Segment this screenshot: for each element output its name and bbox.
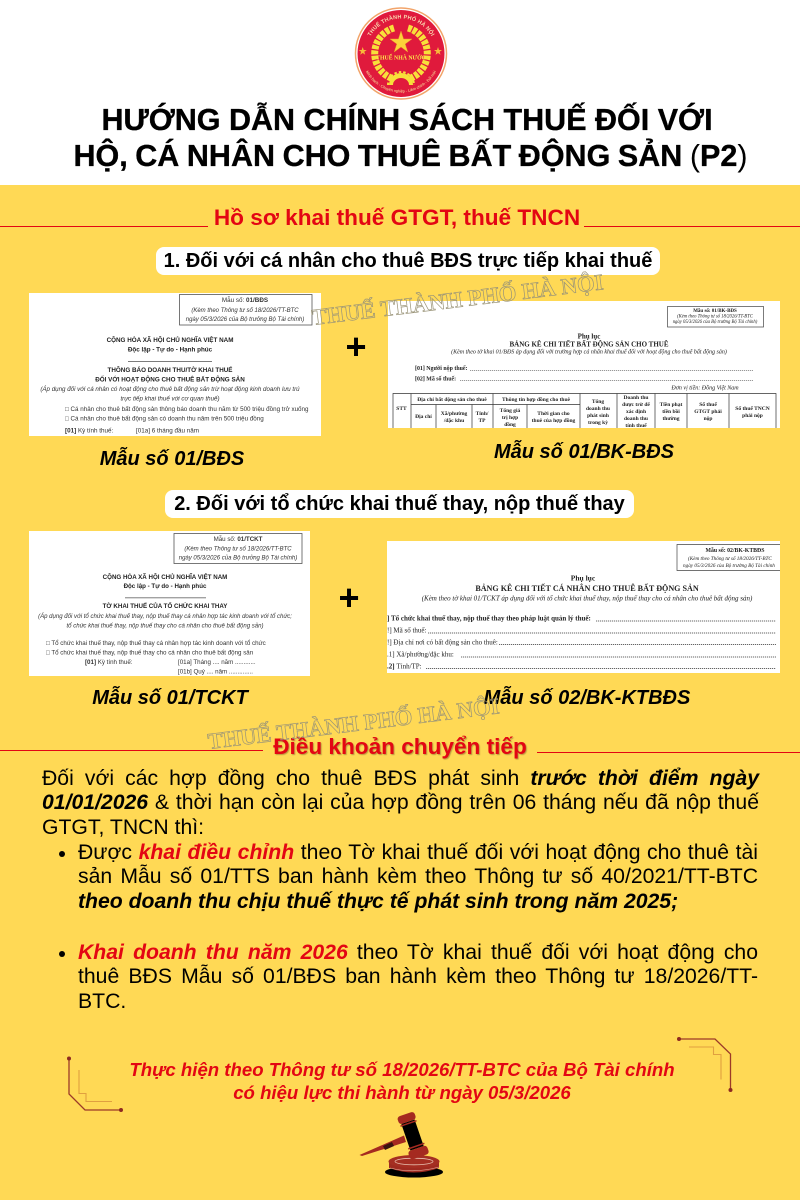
text block: transition intro: GTGT, TNCN thì:	[42, 816, 204, 839]
divider line: section two left	[0, 750, 263, 751]
form: Mẫu số 01/BĐS: □ Cá nhân cho thuê bất động sản có doanh thu năm trên 500 triệu đồng	[65, 416, 264, 422]
title: HỘ, CÁ NHÂN CHO THUÊ BẤT ĐỘNG SẢN (P2)	[73, 139, 748, 173]
form: Mẫu số 01/BK-BĐS: Phụ lục	[578, 332, 600, 340]
form: Mẫu số 02/BK-KTBĐS: .1] Xã/phường/đặc khu:	[387, 650, 454, 658]
form: Mẫu số 01/BK-BĐS: được trừ để	[622, 401, 650, 408]
form: Mẫu số 01/TCKT: ngày 05/3/2026 của Bộ trưởng Bộ Tài chính)	[179, 554, 297, 562]
form: Mẫu số 01/BĐS: (Kèm theo Thông tư số 18/2026/TT-BTC	[191, 307, 299, 314]
form: Mẫu số 01/TCKT	[29, 531, 310, 676]
form: Mẫu số 01/BK-BĐS: Xã/phường	[441, 411, 468, 417]
form: Mẫu số 01/BK-BĐS: GTGT phải	[694, 409, 722, 415]
form: Mẫu số 01/BK-BĐS: tính thuế	[625, 422, 647, 429]
form: Mẫu số 01/BK-BĐS: Tỉnh/	[476, 411, 489, 417]
form: Mẫu số 01/BK-BĐS: Doanh thu	[624, 395, 648, 401]
form: Mẫu số 01/BK-BĐS: Tiền phạt	[660, 401, 683, 408]
form: Mẫu số 01/BK-BĐS: ngày 05/3/2026 của Bộ trưởng Bộ Tài chính)	[673, 320, 758, 325]
icon: tax department logo: Minh bạch - Chuyên nghiệp - Liêm chính - Đổi mới	[366, 70, 436, 94]
form: Mẫu số 01/BK-BĐS: doanh thu	[586, 406, 610, 412]
form: Mẫu số 01/BK-BĐS: (Kèm theo Thông tư số 18/2026/TT-BTC	[677, 314, 754, 320]
divider line: section two right	[537, 752, 800, 753]
form: Mẫu số 01/BK-BĐS: Mẫu số: 01/BK-BĐS	[693, 308, 737, 314]
icon: tax department logo: THUẾ THÀNH PHỐ HÀ NỘI	[367, 14, 435, 36]
form: Mẫu số 01/BK-BĐS: STT	[396, 406, 407, 412]
form: Mẫu số 01/BK-BĐS: Tổng	[592, 398, 604, 405]
form: Mẫu số 01/BK-BĐS: TP	[478, 418, 486, 424]
decorative circuit right	[677, 1037, 732, 1092]
bullet 1: khai điều chỉnh: sản Mẫu số 01/TTS ban hành kèm theo Thông tư số 40/2021/TT-BTC	[78, 865, 758, 888]
form: Mẫu số 01/TCKT: TỜ KHAI THUẾ CỦA TỔ CHỨC KHAI THAY	[103, 602, 228, 610]
form: Mẫu số 02/BK-KTBĐS: Mẫu số: 02/BK-KTBĐS	[706, 547, 764, 554]
form: Mẫu số 01/TCKT: □ Tổ chức khai thuế thay, nộp thuế thay cá nhân hợp tác kinh doanh với tổ chức	[46, 640, 266, 647]
form: Mẫu số 02/BK-KTBĐS	[387, 541, 780, 673]
divider line: section one left	[0, 226, 208, 227]
form: Mẫu số 01/TCKT: CỘNG HÒA XÃ HỘI CHỦ NGHĨA VIỆT NAM	[103, 573, 227, 581]
form: Mẫu số 01/BĐS: CỘNG HÒA XÃ HỘI CHỦ NGHĨA VIỆT NAM	[107, 335, 233, 344]
form: Mẫu số 01/BĐS: trực tiếp khai thuế với cơ quan thuế)	[120, 396, 220, 402]
caption: 01/BK-BĐS: Mẫu số 01/BK-BĐS	[494, 441, 674, 463]
form: Mẫu số 01/BK-BĐS: [02] Mã số thuế:	[415, 376, 456, 382]
form: Mẫu số 01/BK-BĐS: doanh thu	[624, 416, 648, 422]
form: Mẫu số 01/BK-BĐS: Tổng giá	[500, 407, 521, 414]
form: Mẫu số 01/BĐS: Độc lập - Tự do - Hạnh phúc	[128, 346, 213, 354]
icon: gavel	[360, 1111, 443, 1178]
title: HƯỚNG DẪN CHÍNH SÁCH THUẾ ĐỐI VỚI	[101, 103, 713, 137]
form: Mẫu số 02/BK-KTBĐS: (Kèm theo tờ khai 01/TCKT áp dụng đối với tổ chức khai thuế thay, nộp thuế thay cho cá nhân cho thuê bất động sản)	[422, 594, 753, 602]
form: Mẫu số 01/BK-BĐS: Thông tin hợp đồng cho thuê	[502, 396, 571, 403]
form: Mẫu số 01/BĐS: ngày 05/3/2026 của Bộ trưởng Bộ Tài chính)	[186, 316, 304, 323]
form: Mẫu số 01/BK-BĐS: Địa chỉ	[415, 414, 432, 420]
title	[73, 102, 748, 173]
form: Mẫu số 01/BĐS: (Áp dụng đối với cá nhân có hoạt động cho thuê bất động sản trừ hoạt động kinh doanh lưu trú	[40, 386, 300, 393]
form: Mẫu số 01/BK-BĐS: Số thuế TNCN	[735, 405, 770, 412]
plus sign 2: +	[338, 577, 360, 618]
icon: tax department logo	[354, 7, 448, 100]
form: Mẫu số 02/BK-KTBĐS: ngày 05/3/2026 của Bộ trưởng Bộ Tài chính	[683, 563, 775, 569]
form: Mẫu số 01/BK-BĐS: Địa chỉ bất động sản cho thuê	[417, 396, 487, 403]
form: Mẫu số 01/BK-BĐS: BẢNG KÊ CHI TIẾT BẤT ĐỘNG SẢN CHO THUÊ	[510, 340, 669, 348]
footer note: Thực hiện theo Thông tư số 18/2026/TT-BTC của Bộ Tài chính	[129, 1059, 675, 1080]
form: Mẫu số 01/BĐS: Mẫu số: 01/BĐS	[222, 295, 268, 304]
form: Mẫu số 02/BK-KTBĐS: BẢNG KÊ CHI TIẾT CÁ NHÂN CHO THUÊ BẤT ĐỘNG SẢN	[475, 583, 699, 593]
form: Mẫu số 01/TCKT: (Áp dụng đối với tổ chức khai thuế thay, nộp thuế thay cá nhân hợp tác kinh doanh với tổ chức;	[38, 613, 292, 620]
form: Mẫu số 01/BĐS: [01a] 6 tháng đầu năm	[136, 426, 199, 434]
form: Mẫu số 01/BĐS: [01] Kỳ tính thuế:	[65, 426, 114, 434]
form: Mẫu số 01/TCKT: tổ chức khai thuế thay, nộp thuế thay cho cá nhân cho thuê bất động sản)	[66, 622, 264, 630]
form: Mẫu số 01/BK-BĐS: thường	[662, 416, 680, 422]
form: Mẫu số 02/BK-KTBĐS: Phụ lục	[571, 574, 596, 582]
form: Mẫu số 01/BK-BĐS	[388, 301, 780, 429]
form: Mẫu số 01/TCKT: [01a] Tháng .... năm ............	[178, 659, 256, 666]
heading: Điều khoản chuyển tiếp: Điều khoản chuyển tiếp	[273, 734, 527, 759]
form: Mẫu số 01/BK-BĐS: tiền bồi	[662, 408, 680, 415]
form: Mẫu số 01/BK-BĐS: (Kèm theo tờ khai 01/BĐS áp dụng đối với trường hợp cá nhân khai thuế đối với hoạt động cho thuê bất động sản)	[451, 348, 727, 356]
form: Mẫu số 02/BK-KTBĐS: ] Tổ chức khai thuế thay, nộp thuế thay theo pháp luật quản lý thuế:	[387, 614, 591, 622]
form: Mẫu số 01/BĐS	[29, 293, 321, 436]
form: Mẫu số 01/BK-BĐS: /đặc khu	[443, 417, 464, 424]
form: Mẫu số 01/TCKT: □ Tổ chức khai thuế thay, nộp thuế thay cho cá nhân cho thuê bất động sản	[46, 650, 254, 656]
bullet 2: khai doanh thu năm 2026	[59, 941, 758, 1013]
bullet 2: khai doanh thu năm 2026: BTC.	[78, 990, 126, 1013]
heading: Hồ sơ khai thuế: Hồ sơ khai thuế GTGT, thuế TNCN	[214, 205, 580, 230]
decorative circuit left	[67, 1056, 123, 1112]
form: Mẫu số 01/TCKT: [01] Kỳ tính thuế:	[85, 659, 133, 666]
form: Mẫu số 02/BK-KTBĐS: .2] Tỉnh/TP:	[387, 662, 422, 670]
form: Mẫu số 01/BK-BĐS: xác định	[626, 409, 646, 415]
form: Mẫu số 01/BĐS: ĐỐI VỚI HOẠT ĐỘNG CHO THUÊ BẤT ĐỘNG SẢN	[95, 374, 245, 384]
bullet 1: khai điều chỉnh: Được khai điều chỉnh theo Tờ khai thuế đối với hoạt động cho thuê tài	[78, 841, 758, 864]
form: Mẫu số 01/BĐS: THÔNG BÁO DOANH THU/TỜ KHAI THUẾ	[107, 364, 233, 374]
subheading pill 2: 2. Đối với tổ chức khai thuế thay, nộp thuế thay	[174, 493, 625, 515]
form: Mẫu số 01/BK-BĐS: Đơn vị tiền: Đồng Việt Nam	[670, 384, 739, 392]
form: Mẫu số 02/BK-KTBĐS: !] Mã số thuế:	[387, 626, 427, 634]
form: Mẫu số 01/BK-BĐS: đồng	[504, 421, 516, 428]
form: Mẫu số 01/TCKT: Độc lập - Tự do - Hạnh phúc	[124, 583, 207, 590]
text block: transition intro	[42, 767, 760, 839]
form: Mẫu số 01/BK-BĐS: nộp	[704, 416, 712, 422]
form: Mẫu số 01/BK-BĐS: thuê của hợp đồng	[532, 417, 576, 424]
form: Mẫu số 01/BK-BĐS: [01] Người nộp thuế:	[415, 365, 467, 372]
form: Mẫu số 01/BK-BĐS: trong kỳ	[588, 420, 608, 426]
form: Mẫu số 01/BK-BĐS: trị hợp	[502, 415, 518, 421]
divider line: section one right	[584, 226, 800, 227]
form: Mẫu số 01/BK-BĐS: phát sinh	[587, 413, 609, 419]
text block: transition intro: Đối với các hợp đồng cho thuê BĐS phát sinh trước thời điểm ngày	[42, 767, 759, 790]
footer note	[129, 1059, 675, 1103]
caption: 01/BĐS: Mẫu số 01/BĐS	[100, 448, 244, 470]
form: Mẫu số 02/BK-KTBĐS: !] Địa chỉ nơi có bất động sản cho thuê:	[387, 638, 498, 646]
text block: transition intro: 01/01/2026 & thời hạn còn lại của hợp đồng trên 06 tháng nếu đã nộp thuế	[42, 791, 759, 814]
footer note: có hiệu lực thi hành từ ngày 05/3/2026	[233, 1082, 571, 1103]
form: Mẫu số 01/TCKT: Mẫu số: 01/TCKT	[214, 536, 263, 543]
bullet 1: khai điều chỉnh	[59, 841, 758, 913]
bullet 2: khai doanh thu năm 2026: Khai doanh thu năm 2026 theo Tờ khai thuế đối với hoạt động cho	[78, 941, 758, 964]
form: Mẫu số 02/BK-KTBĐS: (Kèm theo Thông tư số 18/2026/TT-BTC	[688, 555, 772, 562]
form: Mẫu số 01/BK-BĐS: Số thuế	[699, 401, 717, 408]
form: Mẫu số 01/TCKT: (Kèm theo Thông tư số 18/2026/TT-BTC	[184, 546, 292, 552]
subheading pill 1: 1. Đối với cá nhân cho thuê BĐS trực tiếp khai thuế	[164, 250, 652, 272]
plus sign 1: +	[345, 326, 367, 367]
form: Mẫu số 01/BĐS: □ Cá nhân cho thuê bất động sản thông báo doanh thu năm từ 500 triệu đồng trở xuống	[65, 406, 309, 413]
form: Mẫu số 01/BK-BĐS: Thời gian cho	[537, 411, 570, 417]
bullet 2: khai doanh thu năm 2026: thuê BĐS Mẫu số 01/BĐS ban hành kèm theo Thông tư 18/2026/TT-	[78, 965, 758, 988]
caption: 01/TCKT: Mẫu số 01/TCKT	[92, 687, 248, 709]
form: Mẫu số 01/TCKT: [01b] Quý .... năm ..............	[178, 668, 253, 676]
bullet 1: khai điều chỉnh: theo doanh thu chịu thuế thực tế phát sinh trong năm 2025;	[78, 890, 678, 913]
caption: 02/BK-KTBĐS: Mẫu số 02/BK-KTBĐS	[484, 687, 690, 709]
icon: tax department logo: THUẾ NHÀ NƯỚC	[376, 54, 426, 62]
form: Mẫu số 01/BK-BĐS: phải nộp	[742, 413, 763, 419]
